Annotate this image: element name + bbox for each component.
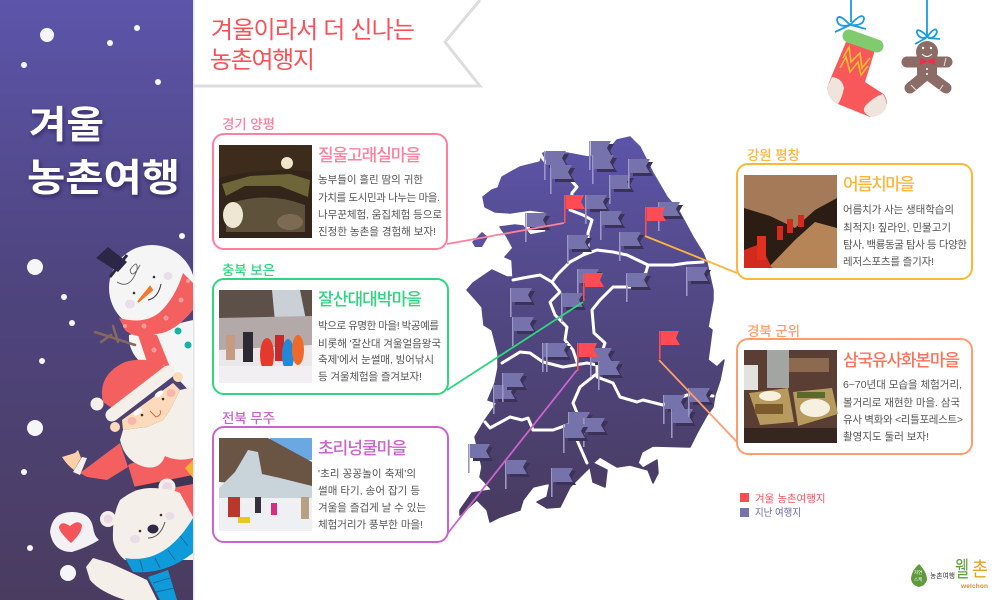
card: 잘산대대박마을: 충북 보은 (222, 263, 275, 278)
photo: ice festival (219, 290, 312, 383)
card: 어름치마을: 최적지! 짚라인, 민물고기 (843, 222, 951, 234)
legend: 지난 여행지 (755, 507, 801, 519)
card: 질울고래실마을: 나무꾼체험, 움집체험 등으로 (318, 209, 442, 221)
card: 초리넝쿨마을: 겨울을 즐겁게 날 수 있는 (318, 502, 426, 514)
card: 질울고래실마을: 가치를 도시민과 나누는 마을. (318, 192, 440, 204)
photo: cave explorers (744, 175, 837, 268)
card: 초리넝쿨마을: '초리 꽁꽁놀이 축제'의 (318, 468, 416, 480)
card: 질울고래실마을: 질울고래실마을 (318, 146, 421, 165)
card: 삼국유사화본마을: 6~70년대 모습을 체험거리, (843, 379, 962, 391)
legend (740, 493, 826, 519)
legend: 겨울 농촌여행지 (755, 493, 826, 505)
card: 질울고래실마을: 농부들이 흘린 땀의 귀한 (318, 173, 423, 186)
photo: lunch boxes (744, 350, 838, 443)
logo (911, 557, 988, 590)
card: 삼국유사화본마을: 경북 군위 (747, 324, 800, 339)
card: 잘산대대박마을: 축제'에서 눈썰매, 빙어낚시 (318, 354, 434, 366)
left sidebar panel (0, 0, 194, 600)
card: 삼국유사화본마을: 삼국유사화본마을 (843, 351, 960, 370)
card: 잘산대대박마을: 비롯해 '잘산대 겨울얼음왕국 (318, 337, 441, 350)
card: 초리넝쿨마을: 체험거리가 풍부한 마을! (318, 519, 423, 531)
logo: 자연 (914, 569, 922, 576)
gingerbread ornament (907, 0, 947, 91)
speech bubble with heart (50, 512, 99, 552)
card: 질울고래실마을: 경기 양평 (222, 117, 275, 132)
card: 질울고래실마을 (213, 117, 447, 249)
card: 잘산대대박마을: 박으로 유명한 마을! 박공예를 (318, 319, 439, 332)
card: 초리넝쿨마을 (213, 411, 448, 542)
stocking ornament (827, 0, 887, 117)
card: 어름치마을: 탐사, 백룡동굴 탐사 등 다양한 (843, 239, 967, 251)
card: 삼국유사화본마을: 볼거리로 재현한 마을. 삼국 (843, 397, 960, 409)
card: 잘산대대박마을 (213, 263, 448, 394)
photo: frozen waterfall (219, 438, 312, 531)
card: 질울고래실마을: 진정한 농촌을 경험해 보자! (318, 225, 436, 238)
card: 어름치마을 (737, 148, 972, 279)
card: 잘산대대박마을: 잘산대대박마을 (318, 290, 422, 309)
card: 초리넝쿨마을: 전북 무주 (222, 411, 275, 426)
photo: cave gathering (219, 145, 312, 238)
header ribbon (193, 0, 480, 86)
snow dots (21, 25, 185, 581)
santa illustration (62, 360, 193, 535)
sidebar title (27, 105, 180, 200)
sidebar title: 농촌여행 (27, 158, 180, 200)
card: 초리넝쿨마을: 초리넝쿨마을 (318, 439, 407, 458)
card: 삼국유사화본마을 (737, 324, 972, 454)
island (472, 232, 488, 247)
sidebar title: 겨울 (29, 105, 104, 147)
logo: welchon (960, 583, 988, 590)
red flags (564, 195, 680, 371)
heading: 겨울이라서 더 신나는 (211, 17, 415, 44)
map of South Korea (460, 137, 724, 522)
logo: 농촌여행 (930, 571, 955, 580)
snowman illustration (95, 245, 195, 395)
card: 삼국유사화본마을: 촬영지도 둘러 보자! (843, 431, 929, 443)
land mass (460, 137, 724, 522)
visited flags (468, 141, 713, 497)
province borders (485, 153, 713, 463)
logo: 웰 (955, 557, 969, 582)
card: 어름치마을: 어름치가 사는 생태학습의 (843, 204, 954, 216)
heading (210, 17, 415, 74)
card: 삼국유사화본마을: 유사 벽화와 <리틀포레스트> (843, 414, 963, 426)
card: 잘산대대박마을: 등 겨울체험을 즐겨보자! (318, 371, 422, 383)
logo: 촌 (972, 558, 988, 581)
card: 어름치마을: 레저스포츠를 즐기자! (843, 256, 934, 268)
card: 어름치마을: 강원 평창 (747, 148, 800, 163)
card: 초리넝쿨마을: 썰매 타기, 송어 잡기 등 (318, 485, 420, 497)
card: 어름치마을: 어름치마을 (843, 175, 915, 194)
heading: 농촌여행지 (210, 47, 315, 74)
polar bear illustration (86, 478, 193, 600)
connector lines (447, 223, 737, 533)
logo: 스케 (914, 576, 922, 583)
